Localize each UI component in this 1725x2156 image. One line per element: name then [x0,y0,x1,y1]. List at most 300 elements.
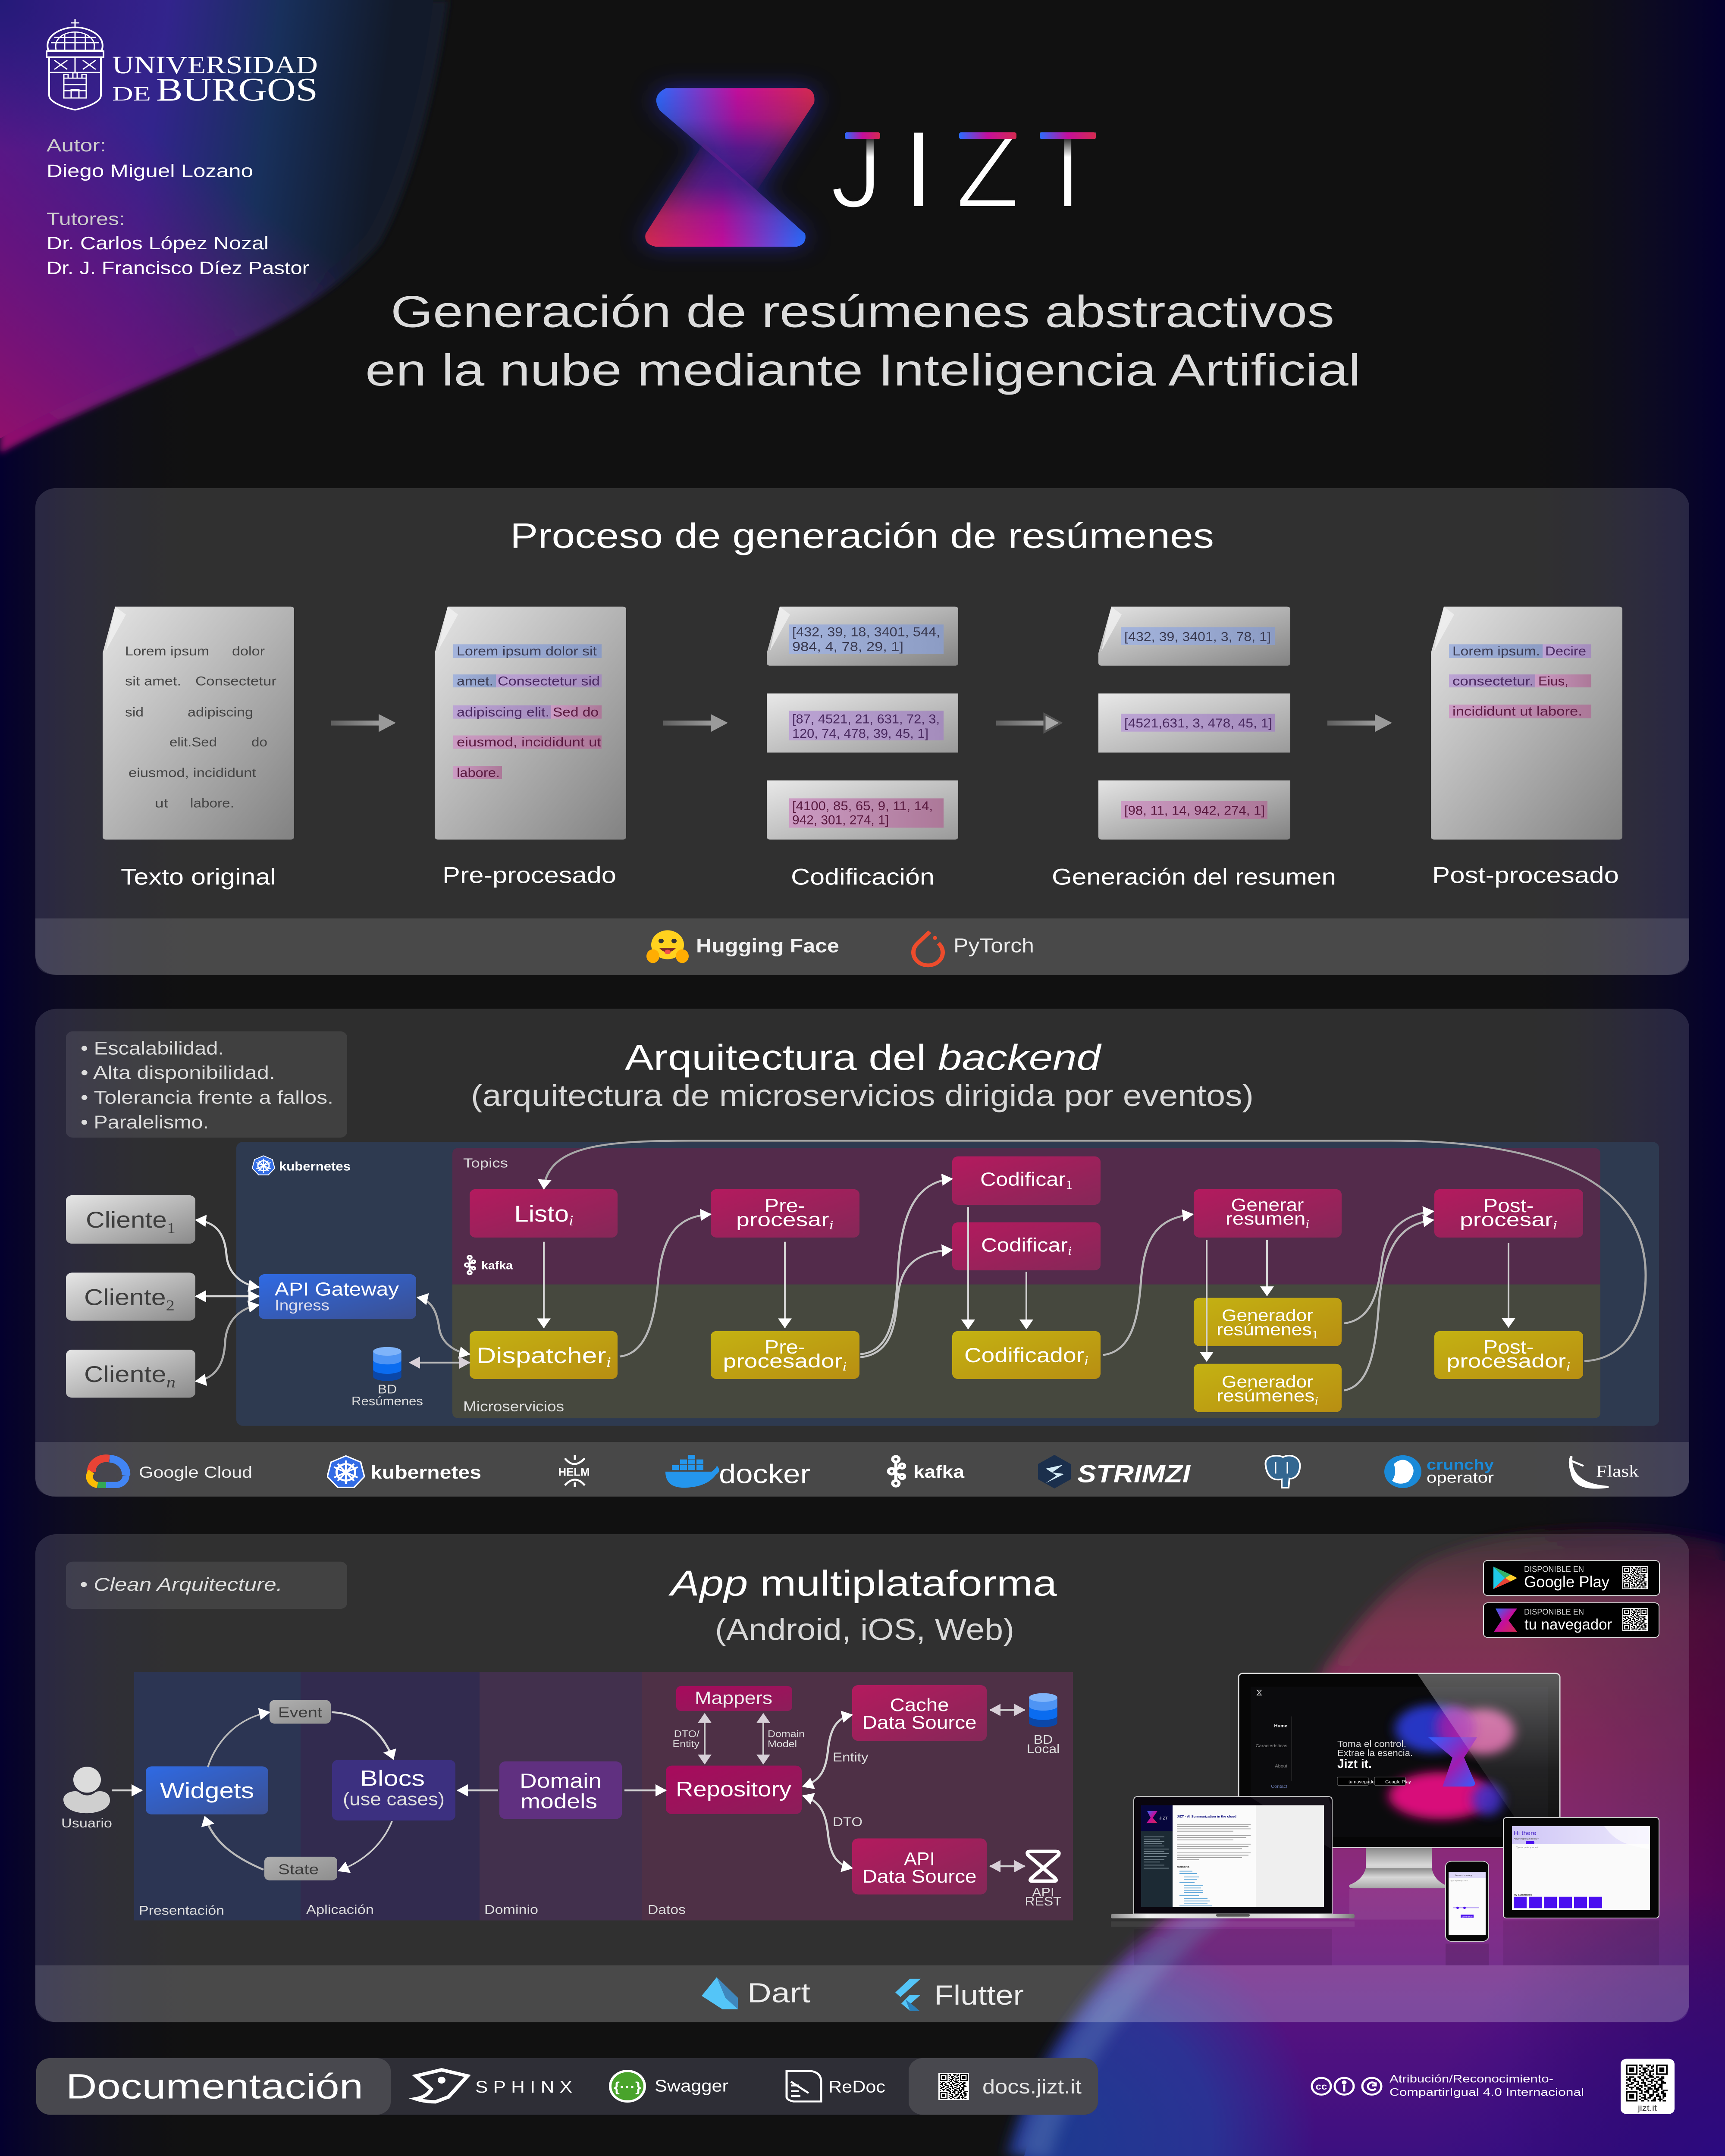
service: pre-procesador: procesador [723,1351,831,1372]
document: post-procesado: consectetur. [1452,674,1534,688]
floor reflections [1111,1889,1659,1965]
document: texto original: sid [125,705,144,719]
document: pre-procesado: Consectetur sid [498,674,600,688]
document: texto original: elit.Sed [169,735,217,749]
monitor screen text: About [1275,1764,1287,1769]
main title [365,286,1361,395]
kubernetes cluster box [236,1142,1659,1426]
license: CompartirIgual 4.0 Internacional [1389,2086,1584,2098]
label: pre-procesado: Pre-procesado [442,863,616,888]
badge: google play: DISPONIBLE EN [1524,1565,1584,1574]
document: texto original [103,607,294,840]
arrow [331,714,396,732]
arrow: pre-procesador to codificar i [860,1250,952,1357]
tech logo: crunchy operator: operator [1427,1469,1494,1486]
laptop: JIZT [1159,1816,1168,1820]
arrow: event to blocs [332,1712,393,1759]
arrow: post-procesador back to listo [544,1141,1646,1361]
panel: proceso de generación de resúmenes [35,488,1689,975]
docs link: docs.jizt.it [982,2076,1082,2098]
topics zone [452,1148,1600,1285]
tech logo: google cloud: Google Cloud [139,1463,252,1481]
icon: API REST: API [1032,1886,1054,1899]
tech logo: kubernetes: kubernetes [370,1462,481,1482]
API gateway [259,1274,416,1319]
service: generador i [1194,1364,1342,1412]
panel: arquitectura del backend [35,1009,1689,1497]
license: Atribución/Reconocimiento- [1389,2073,1553,2085]
arrow: post-procesar to post-procesador [1508,1243,1509,1327]
icon: kubernetes small [252,1156,275,1175]
service: post-procesador: procesador [1446,1351,1555,1372]
box: widgets: Widgets [160,1778,254,1803]
document: texto original: adipiscing [188,705,253,719]
client 1 [66,1195,195,1244]
box: cache data source: Cache [890,1695,949,1715]
topic: codificar 1 [952,1156,1101,1205]
mapper labels: Domain [768,1729,805,1739]
API gateway: API Gateway [275,1279,399,1300]
tech logo: crunchy operator [1384,1455,1494,1488]
box: event: Event [278,1704,322,1720]
monitor screen text: Home [1274,1724,1287,1728]
panel footer band [35,1965,1689,2022]
document: post-procesado: Eius, [1538,674,1568,688]
arrow: cliente n to gateway [196,1305,259,1381]
arrow: widgets to event [208,1712,270,1767]
icon: BD local: BD [1034,1733,1053,1747]
qr code [1622,1566,1648,1589]
monitor screen text: Toma el control. [1337,1739,1406,1749]
documentation bar [36,2058,1098,2115]
document: post-procesado: Decire [1545,644,1586,658]
badge: navegador [1484,1603,1659,1638]
heading: arquitectura: Arquitectura del backend [625,1037,1102,1078]
icon: university crest [47,19,104,110]
authors and tutors: Diego Miguel Lozano [47,161,253,181]
client n [66,1350,195,1398]
service: dispatcher [470,1331,618,1379]
service: post-procesador: Post- [1484,1336,1534,1358]
document: generación del resumen: [4521,631, 3, 478, 45, 1] [1124,716,1272,730]
tech logo: docker [665,1455,810,1489]
laptop [1111,1796,1355,1918]
document: codificación: [87, 4521, 21, 631, 72, 3, [792,711,940,726]
document: texto original: labore. [190,796,234,810]
monitor screen text: Google Play [1385,1780,1411,1784]
label: dto: DTO [833,1815,862,1829]
document: generación del resumen [1098,607,1290,840]
authors and tutors: Tutores: [47,210,125,229]
arrow: codificar 1 to codificador [967,1207,969,1329]
arrow: cliente 1 to gateway [196,1220,259,1287]
icon: usuario [61,1767,112,1830]
tech logo: kafka: kafka [913,1462,965,1482]
feature list: • Tolerancia frente a fallos. [81,1087,333,1108]
JIZT wordmark: Z [956,108,1019,231]
topic: post-procesar: procesar [1460,1209,1544,1231]
JIZT wordmark [830,108,1099,231]
logo: redoc: ReDoc [828,2077,885,2096]
tech logo: flutter [895,1979,1024,2011]
document: generación del resumen: [98, 11, 14, 942, 274, 1] [1124,803,1265,818]
arrow: blocs to state [339,1821,392,1871]
tablet: Type or paste your text... [1516,1846,1540,1849]
phone: Type or paste your text... [1450,1880,1469,1881]
arrow: cliente 2 to gateway [196,1295,259,1297]
document: pre-procesado: eiusmod, incididunt ut [457,735,601,749]
box: mappers [676,1686,792,1711]
layer bands: Presentación [139,1903,224,1918]
tech logo: docker: docker [719,1459,810,1489]
arrow: generar to generador 1 [1266,1240,1268,1295]
topic: codificar 1: Codificar [980,1169,1065,1190]
badge: navegador: tu navegador [1524,1616,1612,1633]
box: cache data source: Data Source [862,1712,977,1733]
arrow: usuario to widgets [112,1789,142,1792]
monitor screen text: Contact [1271,1784,1287,1789]
feature list [66,1031,347,1138]
arrow: repository to mappers right [762,1714,764,1764]
service: post-procesador: i [1566,1359,1571,1373]
service: post-procesador [1434,1331,1583,1379]
document: texto original: Consectetur [195,674,276,688]
topic: post-procesar [1434,1189,1583,1238]
logo: swagger: Swagger [655,2076,728,2095]
topic: post-procesar: i [1553,1217,1557,1232]
document: texto original: eiusmod, incididunt [129,765,256,780]
box: repository: Repository [676,1777,792,1801]
topic: generar resumen: resumen [1226,1209,1303,1228]
logo: hugging face: Hugging Face [696,935,839,957]
box: domain models: models [521,1790,597,1813]
box: cache data source [852,1685,987,1741]
tech logo: kafka [888,1457,965,1486]
document: codificación: [432, 39, 18, 3401, 544, [792,625,940,639]
topic: pre-procesar: Pre- [765,1195,805,1216]
layer bands: Aplicación [306,1902,374,1917]
topic: listo: i [569,1213,574,1228]
arrow [996,714,1061,732]
label: kafka: kafka [481,1259,513,1272]
feature list: • Paralelismo. [81,1112,209,1133]
authors and tutors: Autor: [47,136,106,155]
arrow: domain to blocs [458,1789,498,1792]
logo: swagger: {···} [614,2079,641,2095]
clean architecture note: • Clean Arquitecture. [80,1574,282,1595]
arrow: repository to mappers left [704,1714,706,1764]
university name: BURGOS [156,72,318,108]
arrow [663,714,728,732]
document: codificación: 942, 301, 274, 1] [792,812,889,827]
client n: n [166,1373,176,1391]
label: entity: Entity [833,1750,869,1764]
service: codificador [952,1331,1101,1379]
topic: post-procesar: Post- [1484,1195,1534,1216]
laptop: JIZT - AI Summarization in the cloud [1177,1814,1236,1818]
mapper labels [673,1729,805,1749]
tech logo: kubernetes [327,1456,481,1487]
label: kubernetes: kubernetes [279,1160,351,1173]
document: pre-procesado: labore. [457,765,500,780]
background blob: top-left [0,0,448,454]
document: codificación: 984, 4, 78, 29, 1] [792,639,903,654]
docs link [909,2058,1098,2115]
client 2: Cliente [84,1285,165,1310]
arrow: listo to dispatcher [543,1242,545,1328]
service: generador 1: Generador [1222,1306,1313,1325]
box: domain models [499,1761,622,1819]
arrow: pre-procesar to pre-procesador [784,1242,786,1328]
box: api data source [852,1838,987,1894]
arrow: generar to generador i [1206,1240,1208,1361]
box: event [270,1700,331,1724]
logo: pytorch [913,932,1034,965]
topic: listo: Listo [514,1201,569,1227]
monitor hero artwork [1389,1705,1515,1819]
layer bands [134,1672,1073,1921]
university logo [47,19,318,110]
document: generación del resumen: [432, 39, 3401, 3, 78, 1] [1124,629,1271,644]
document: texto original: do [251,735,267,749]
icon: BD local [1027,1693,1060,1756]
arrow [1327,714,1392,732]
JIZT wordmark: J [830,108,883,231]
service: pre-procesador [711,1331,859,1379]
service: codificador: Codificador [964,1344,1082,1366]
qr: jizt.it: jizt.it [1637,2103,1657,2112]
icon: API REST [1025,1852,1062,1908]
arrow: generador i to post-procesar [1344,1220,1433,1391]
license [1312,2073,1584,2098]
topic: codificar i [952,1222,1101,1270]
logo: redoc [787,2071,885,2102]
feature list: • Alta disponibilidad. [81,1062,275,1083]
document: pre-procesado: Lorem ipsum dolor sit [457,644,597,658]
document: post-procesado: incididunt ut labore. [1452,704,1582,718]
client 2: 2 [166,1297,175,1314]
icon: API REST: REST [1025,1895,1062,1908]
monitor screen text: Características [1256,1744,1287,1749]
qr: jizt.it [1621,2059,1675,2114]
monitor screen text [1256,1690,1413,1789]
monitor screen text: Extrae la esencia. [1337,1748,1413,1758]
service: dispatcher: Dispatcher [477,1343,596,1368]
document: codificación: 120, 74, 478, 39, 45, 1] [792,726,928,740]
microservices zone [452,1285,1600,1418]
service: generador 1: 1 [1312,1329,1318,1341]
service: pre-procesador: i [842,1359,847,1373]
arrow: api to REST [990,1865,1025,1868]
logo: swagger [610,2071,728,2102]
tech logo: flask: Flask [1596,1462,1639,1480]
box: mappers: Mappers [695,1689,772,1708]
topic: listo [470,1189,618,1238]
tablet: My Summaries [1514,1894,1532,1896]
tech logo: strimzi [1038,1455,1191,1489]
service: generador 1 [1194,1298,1342,1346]
API gateway: Ingress [275,1297,329,1313]
monitor [1239,1673,1560,1888]
icon: JIZT hourglass logo [645,88,815,247]
icons: creative commons [1312,2078,1381,2095]
panel footer band [35,1442,1689,1496]
panel: app multiplataforma [35,1534,1689,2022]
service: codificador: i [1084,1354,1088,1369]
arrow: codificador to generar [1103,1214,1193,1355]
document: post-procesado: Lorem ipsum. [1452,644,1540,658]
service: generador i: Generador [1222,1372,1313,1391]
tech logo: google cloud [90,1458,252,1485]
arrow: state to widgets [205,1817,263,1870]
license: cc [1316,2081,1327,2092]
university name: DE [112,83,151,106]
feature list: • Escalabilidad. [81,1038,224,1059]
authors and tutors [47,136,309,278]
authors and tutors: Dr. J. Francisco Díez Pastor [47,258,309,278]
document: texto original: dolor [232,644,265,658]
label: codificación: Codificación [791,864,935,890]
arrow: generador 1 to post-procesar [1344,1211,1433,1323]
icon: jizt small [1494,1608,1517,1632]
JIZT wordmark: I [901,108,936,231]
icon: BD resúmenes: Resúmenes [351,1395,423,1408]
document: pre-procesado: amet. [457,674,493,688]
device mockups [1111,1673,1659,1965]
authors and tutors: Dr. Carlos López Nozal [47,234,269,254]
tech logo: dart: Dart [747,1978,810,2009]
tech logo: helm [558,1455,590,1487]
badge: google play: Google Play [1524,1573,1609,1591]
mapper labels: Entity [673,1739,699,1749]
tech logo: dart [702,1977,810,2009]
laptop: Memoria [1177,1866,1189,1868]
client n: Cliente [84,1362,165,1387]
box: widgets [146,1766,268,1814]
logo: hugging face [646,930,839,963]
box: repository [666,1766,802,1814]
topic: generar resumen [1194,1189,1342,1238]
document: texto original: Lorem ipsum [125,644,209,658]
phone: New summary [1455,1874,1472,1877]
badge: google play [1484,1561,1659,1595]
subheading: (arquitectura de microservicios dirigida por eventos) [471,1078,1254,1112]
client 2 [66,1272,195,1321]
monitor screen text: Jizt it. [1337,1758,1372,1771]
heading: documentación: Documentación [66,2067,363,2106]
topic: generar resumen: Generar [1231,1196,1304,1215]
tech logo: flask [1570,1457,1639,1488]
phone: Summarize [1462,1916,1473,1918]
box: blocs [332,1760,455,1821]
service: generador 1: resúmenes [1217,1320,1311,1339]
service: generador i: i [1314,1395,1318,1407]
box: state [264,1857,337,1880]
university name [112,51,318,108]
arrow: repository to api [803,1796,852,1868]
panel footer band [35,918,1689,975]
logo: pytorch: PyTorch [953,935,1034,957]
icon: BD resúmenes [351,1347,423,1408]
arrow: domain to repository [624,1789,666,1792]
client 1: Cliente [86,1207,166,1233]
heading: proceso: Proceso de generación de resúmenes [510,516,1214,555]
topic: pre-procesar: procesar [736,1209,820,1231]
document: codificación: [4100, 85, 65, 9, 11, 14, [792,799,933,813]
clean architecture note [66,1562,347,1609]
label: topics: Topics [463,1155,508,1170]
arrow: gateway to dispatcher [417,1297,470,1354]
heading: app: App multiplataforma [668,1563,1057,1603]
background blob: bottom-right [1007,1529,1725,2156]
document: pre-procesado: Sed do [553,705,599,719]
box: blocs: Blocs [360,1766,425,1791]
topic: codificar i: Codificar [981,1235,1066,1256]
box: api data source: Data Source [862,1866,977,1887]
box: domain models: Domain [520,1769,602,1792]
logo: sphinx: SPHINX [475,2078,572,2096]
topic: pre-procesar: i [829,1217,834,1232]
label: texto original: Texto original [121,864,276,890]
document: pre-procesado: adipiscing elit. [457,705,549,719]
subheading: plataformas: (Android, iOS, Web) [715,1612,1014,1646]
tablet: Anything to jizt today? [1514,1838,1539,1840]
logo: sphinx [416,2070,572,2102]
box: api data source: API [904,1849,935,1869]
label: microservicios: Microservicios [463,1398,564,1415]
arrow: dispatcher to pre-procesar [620,1214,711,1357]
main title: en la nube mediante Inteligencia Artificial [365,345,1361,395]
service: pre-procesador: Pre- [765,1336,805,1358]
university name: UNIVERSIDAD [112,51,318,79]
tech logo: strimzi: STRIMZI [1077,1460,1191,1488]
topic: codificar i: i [1068,1244,1072,1257]
topic: generar resumen: i [1305,1218,1309,1231]
label: generación del resumen: Generación del resumen [1052,864,1336,890]
qr code [1622,1608,1648,1631]
document: texto original: ut [155,796,168,810]
label: post-procesado: Post-procesado [1432,863,1619,888]
service: generador i: resúmenes [1217,1386,1311,1405]
arrow: pre-procesador to codificar 1 [860,1179,952,1354]
box: blocs: (use cases) [343,1789,445,1809]
monitor glare [1418,1674,1559,1848]
badge: navegador: DISPONIBLE EN [1524,1608,1584,1617]
tech logo: flutter: Flutter [934,1980,1024,2011]
client 1: 1 [167,1220,176,1237]
monitor screen text: tu navegador [1349,1780,1377,1784]
icon: play triangle [1493,1567,1517,1589]
document: codificación [767,607,958,840]
topic: pre-procesar [711,1189,859,1238]
arrow: cache to BD local [990,1709,1025,1711]
icon: BD local: Local [1027,1742,1060,1756]
arrow: base de datos to dispatcher [410,1362,470,1364]
JIZT wordmark: T [1036,108,1099,231]
service: dispatcher: i [606,1354,611,1370]
tablet: Hi there [1514,1830,1537,1836]
mapper labels: DTO/ [674,1729,699,1739]
arrow: codificar i to codificador [1026,1272,1027,1329]
icon: kafka small [465,1256,475,1274]
icon: usuario: Usuario [61,1816,112,1830]
arrow: repository to cache [803,1715,852,1786]
tech logo: crunchy operator: crunchy [1427,1456,1494,1473]
topic: codificar 1: 1 [1066,1178,1073,1191]
document: pre-procesado [435,607,626,840]
phone [1446,1861,1489,1941]
main title: Generación de resúmenes abstractivos [391,286,1334,337]
